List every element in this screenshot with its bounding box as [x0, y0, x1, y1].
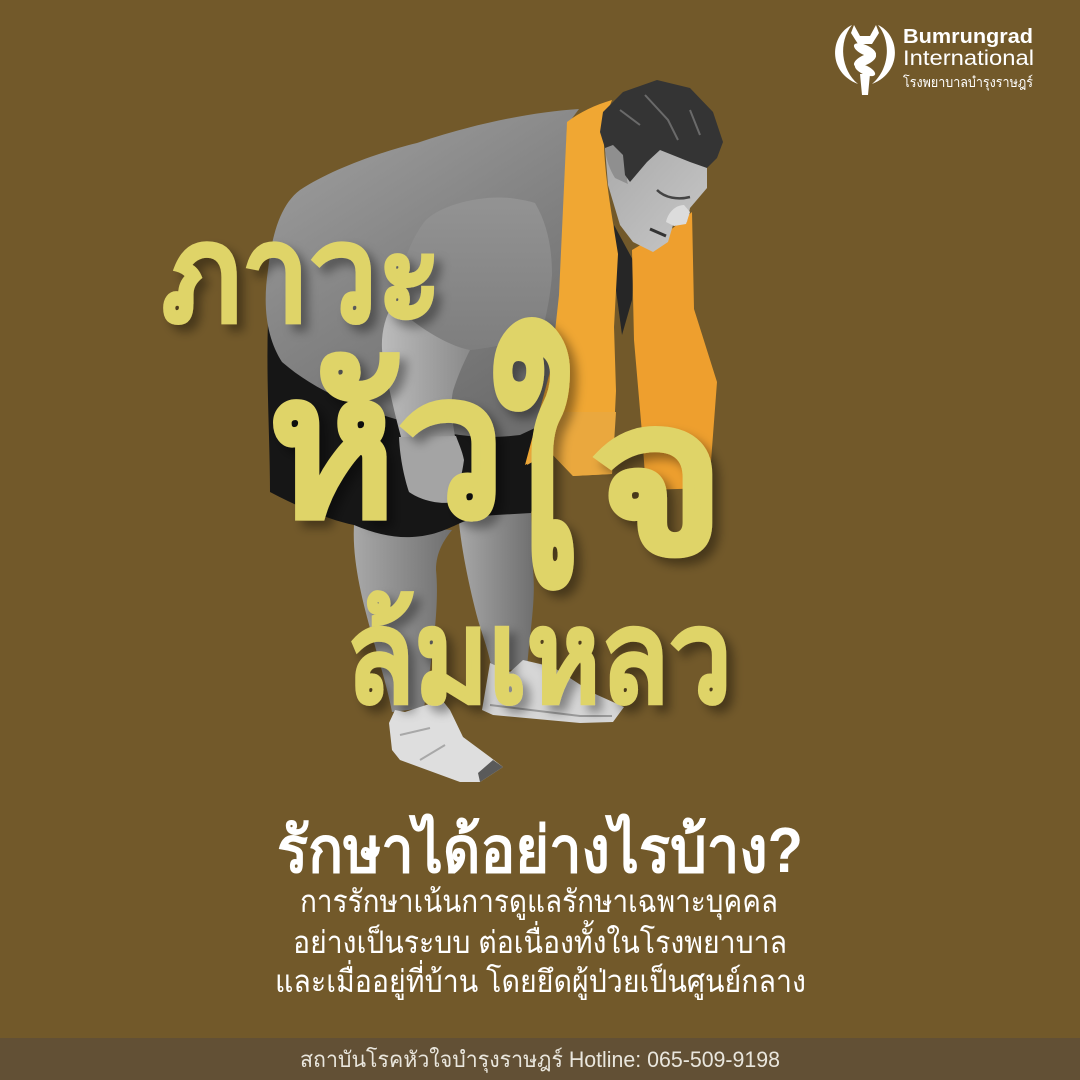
hotline text: สถาบันโรคหัวใจบำรุงราษฎร์ Hotline: 065-509-9198 [300, 1047, 780, 1073]
shirt [266, 109, 579, 437]
logo: Bumrungrad International: International [903, 47, 1034, 70]
logo wordmark: Bumrungrad [903, 26, 1033, 48]
towel left strip [525, 100, 618, 476]
body text [275, 884, 806, 1000]
sleeve [393, 197, 552, 350]
title line 1: ภาวะ [162, 198, 442, 350]
title line 2: หัว: หัว [268, 336, 506, 559]
body text: อย่างเป็นระบบ ต่อเนื่องทั้งในโรงพยาบาล [293, 920, 787, 960]
title: ภาวะ หัวใจ ล้มเหลว [162, 198, 732, 730]
towel right strip [632, 212, 717, 490]
head: hair [600, 80, 723, 182]
neck under the head [614, 225, 634, 335]
right leg [458, 510, 534, 672]
left leg [354, 525, 452, 712]
shorts [267, 320, 537, 537]
towel left fringe [527, 412, 616, 476]
head: ear [605, 145, 628, 184]
title line 2: ใ: ใ [492, 320, 574, 643]
head: face [605, 135, 707, 252]
logo: Bumrungrad International: โรงพยาบาลบำรุงราษฎร์ [903, 74, 1033, 91]
front shoe [389, 700, 503, 782]
photo: man bending forward with towel [266, 80, 723, 782]
title line 2: จ: จ [590, 357, 726, 598]
body text: การรักษาเน้นการดูแลรักษาเฉพาะบุคคล [300, 884, 778, 921]
body text: และเมื่ออยู่ที่บ้าน โดยยึดผู้ป่วยเป็นศูนย์กลาง [275, 960, 806, 1000]
head: hair highlights [620, 95, 700, 140]
back shoe [482, 660, 624, 723]
arm [382, 304, 470, 442]
head: eye, mouth and nose [650, 190, 690, 236]
footer bar [0, 1038, 1080, 1080]
subheading: รักษาได้อย่างไรบ้าง? [277, 813, 803, 886]
logo: Bumrungrad International [835, 25, 1034, 95]
icon: crescent and staff [835, 25, 895, 95]
hand [399, 436, 464, 503]
title line 3: ล้มเหลว [346, 584, 732, 730]
